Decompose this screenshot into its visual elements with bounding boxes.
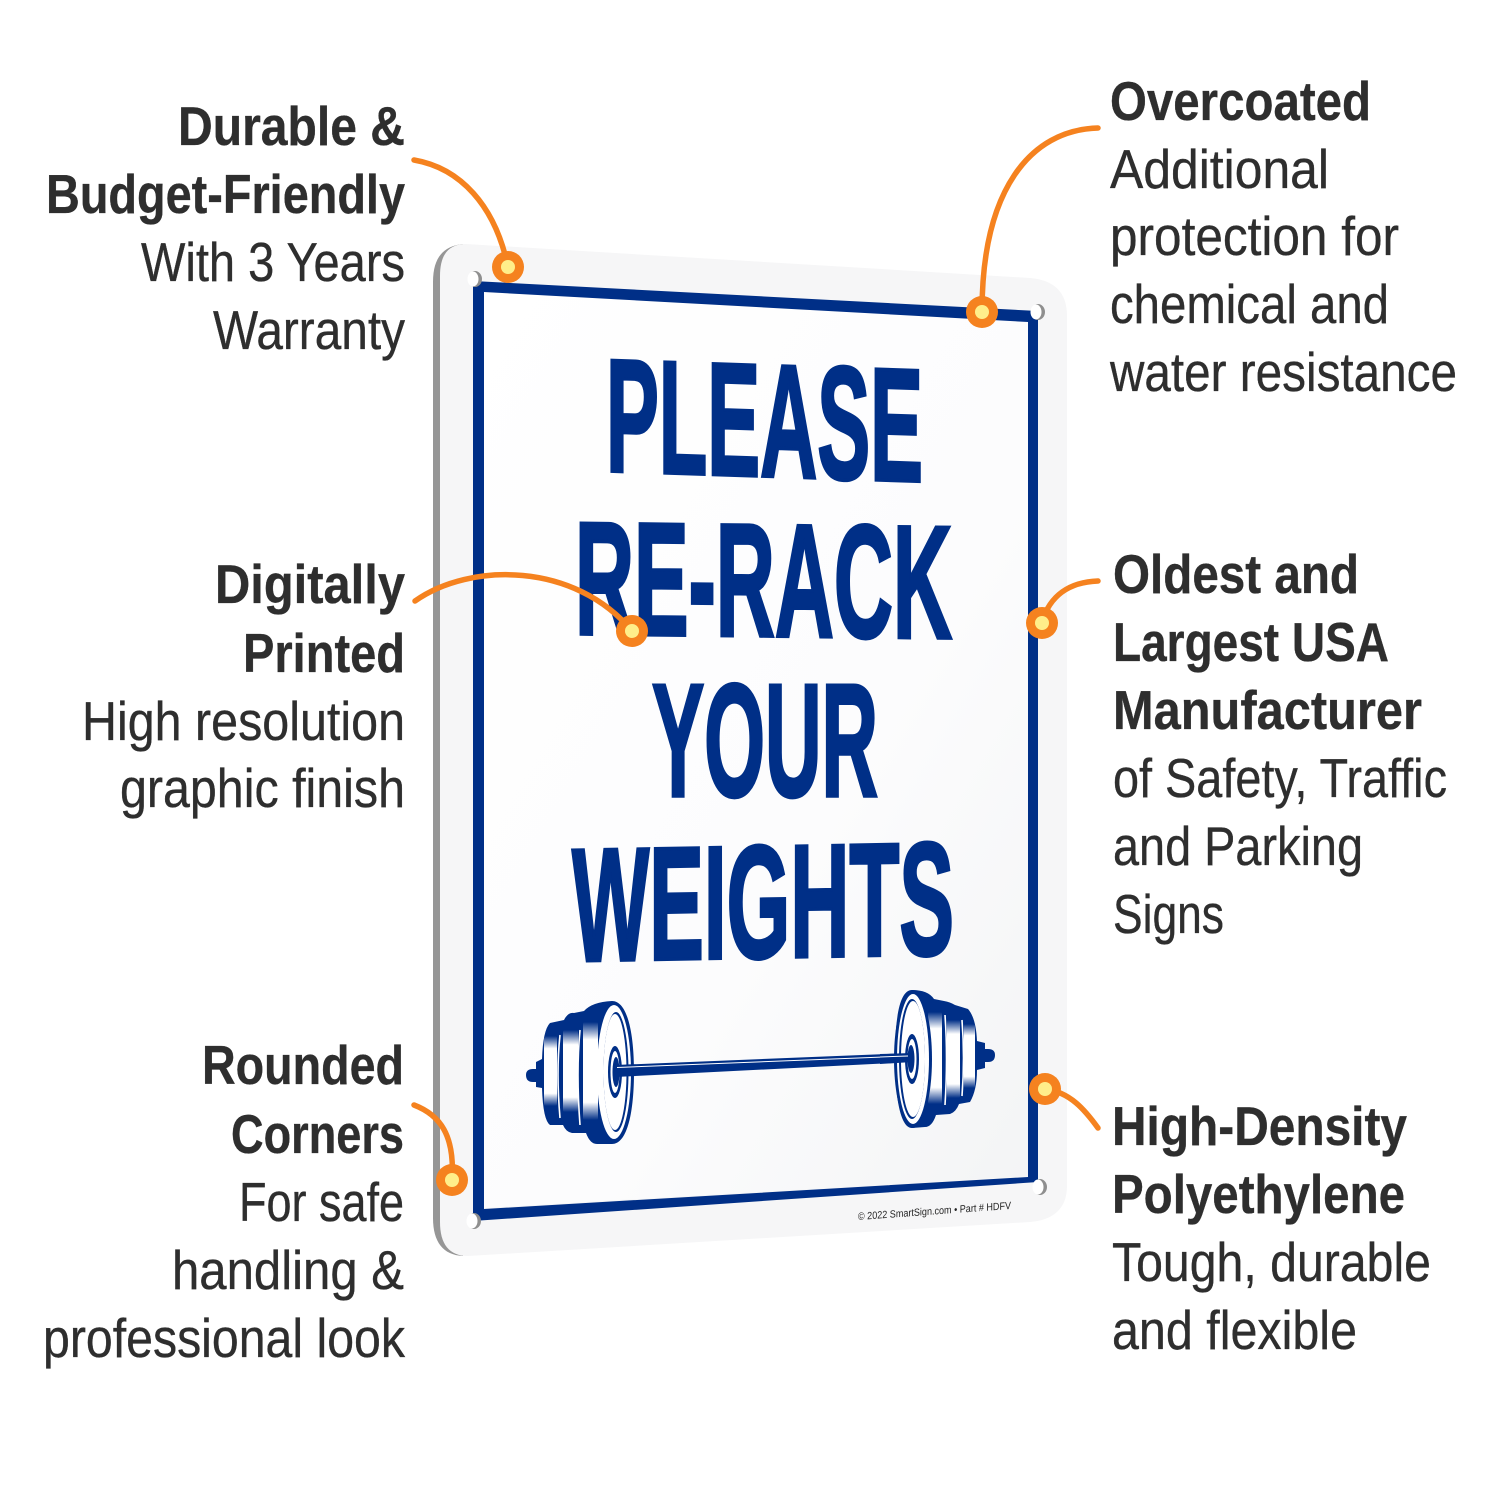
barbell left plates	[526, 1001, 634, 1144]
callout text: High resolution	[82, 690, 405, 752]
callout text: Digitally	[215, 553, 405, 615]
sign side edge	[433, 244, 463, 1256]
callout text: and Parking	[1113, 815, 1363, 877]
callout text: Additional	[1110, 138, 1329, 200]
connector	[982, 128, 1098, 312]
mounting hole: bottom right	[1032, 1179, 1047, 1195]
copyright line: © 2022 SmartSign.com • Part # HDFV	[858, 1200, 1011, 1223]
callout text: protection for	[1110, 205, 1399, 267]
callout text: Corners	[231, 1103, 404, 1165]
callout text: With 3 Years	[141, 231, 405, 293]
callout text: Overcoated	[1110, 70, 1371, 132]
marker dot	[492, 251, 524, 283]
callout text: Manufacturer	[1113, 679, 1422, 741]
callout text	[82, 553, 405, 819]
connector	[414, 1105, 452, 1180]
callout: Oldest and Largest USA Manufacturer	[1026, 543, 1447, 945]
callout text: Budget-Friendly	[46, 163, 405, 225]
sign headline	[572, 326, 954, 996]
callout text: Rounded	[202, 1034, 404, 1096]
callout text: High-Density	[1112, 1095, 1407, 1157]
callout text: professional look	[43, 1307, 405, 1369]
blue border	[473, 281, 1038, 1221]
sign headline: PLEASE	[606, 326, 923, 516]
callout text: Polyethylene	[1112, 1163, 1405, 1225]
callout text	[1113, 543, 1447, 945]
callout text: Signs	[1113, 883, 1224, 945]
marker dot	[616, 615, 648, 647]
callout text: of Safety, Traffic	[1113, 747, 1447, 809]
callout text: and flexible	[1112, 1299, 1357, 1361]
sign	[433, 244, 1067, 1256]
headline line: RE-RACK: RE-RACK	[575, 489, 952, 673]
headline line: WEIGHTS: WEIGHTS	[572, 809, 954, 996]
mounting hole: top left	[468, 271, 482, 287]
connector	[1042, 581, 1098, 622]
marker dot	[436, 1164, 468, 1196]
barbell right plates	[880, 990, 995, 1128]
callout text: water resistance	[1109, 341, 1457, 403]
marker dot	[1026, 607, 1058, 639]
callout text: Largest USA	[1113, 611, 1389, 673]
marker dot	[966, 296, 998, 328]
mounting hole: top right	[1030, 304, 1045, 320]
callout text: chemical and	[1110, 273, 1389, 335]
callout: Digitally Printed	[82, 553, 648, 819]
barbell bar	[615, 1053, 912, 1077]
callout: Rounded Corners	[43, 1034, 468, 1369]
callout text: graphic finish	[120, 757, 405, 819]
callout: High-Density Polyethylene	[1029, 1073, 1431, 1361]
callout: Durable & Budget-Friendly	[46, 95, 524, 361]
callout text: Durable &	[178, 95, 405, 157]
callout text: Tough, durable	[1112, 1231, 1431, 1293]
callout text	[43, 1034, 405, 1369]
callout text	[1109, 70, 1457, 403]
mounting hole: bottom left	[466, 1213, 481, 1229]
callout text: Warranty	[213, 299, 405, 361]
callout text: handling &	[172, 1239, 404, 1301]
marker dot	[1029, 1073, 1061, 1105]
callout text: For safe	[239, 1171, 404, 1233]
callout text	[1112, 1095, 1431, 1361]
callout text	[46, 95, 405, 361]
icon: barbell	[526, 990, 995, 1144]
callout: Overcoated	[966, 70, 1457, 403]
callout text: Printed	[243, 622, 405, 684]
connector	[1045, 1089, 1098, 1128]
connector	[414, 160, 508, 267]
sign headline: YOUR	[652, 651, 878, 831]
sign printed area	[484, 292, 1028, 1208]
sign face	[440, 244, 1067, 1256]
callout text: Oldest and	[1113, 543, 1359, 605]
connector	[415, 575, 632, 631]
